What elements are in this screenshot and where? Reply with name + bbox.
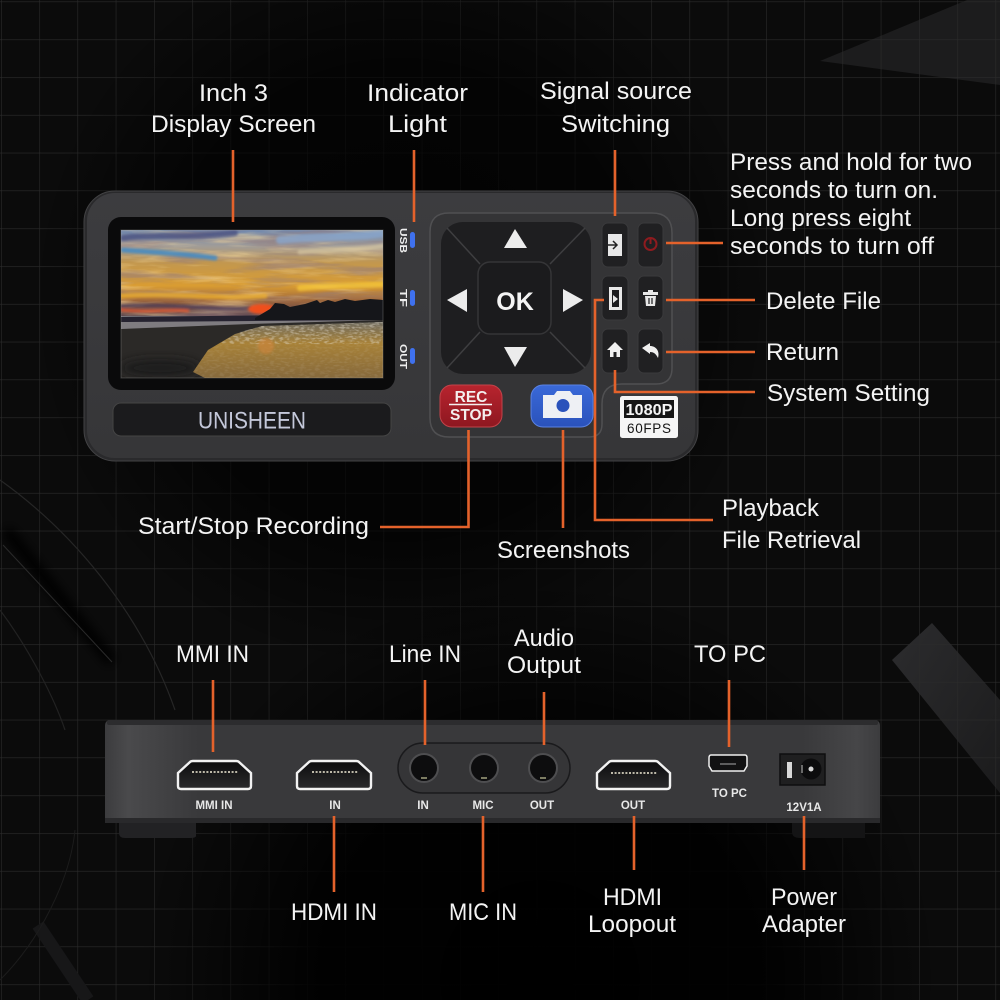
jack: audio output: OUT (530, 800, 554, 812)
button: delete (638, 276, 663, 320)
label: power instructions: Press and hold for two (730, 149, 972, 176)
badge: 1080P 60FPS (620, 396, 678, 438)
leader line: screenshot (562, 430, 564, 528)
label: indicator light (367, 80, 468, 138)
label: signal source switching (540, 78, 692, 138)
leader line: HDMI loopout (633, 816, 635, 870)
label: HDMI loopout: Loopout (588, 911, 676, 938)
label: screenshots: Screenshots (497, 537, 630, 564)
indicator lights: TF (397, 289, 408, 307)
label: signal source switching: Switching (561, 111, 670, 138)
leader line: delete (666, 299, 755, 301)
label: audio output: Output (507, 652, 581, 679)
label: HDMI IN: HDMI IN (291, 899, 377, 926)
label: playback file retrieval: Playback (722, 495, 820, 522)
leader line: system setting (615, 370, 755, 392)
port: 12V power (780, 754, 825, 814)
leader line: TO PC (728, 680, 730, 747)
leader line: audio output (543, 692, 545, 745)
leader line: MMI IN (212, 680, 214, 752)
label: indicator light: Indicator (367, 80, 468, 107)
label: HDMI loopout: HDMI (603, 884, 662, 911)
jack: mic in (470, 754, 498, 812)
directional pad (441, 222, 591, 374)
indicator lights: OUT (397, 344, 408, 369)
label: power adapter (762, 884, 846, 938)
label: power adapter: Power (771, 884, 837, 911)
label: signal source switching: Signal source (540, 78, 692, 105)
label: indicator light: Light (388, 111, 447, 138)
button: return (638, 329, 663, 373)
port: HDMI IN: IN (329, 800, 341, 812)
button: signal source (602, 223, 628, 267)
leader line: power button (666, 242, 723, 244)
front panel of device (84, 191, 698, 461)
background prop: pencil and arcs (0, 480, 175, 1000)
button recess panel (430, 213, 672, 437)
jack: line in: IN (417, 800, 429, 812)
label: system setting: System Setting (767, 380, 930, 407)
label: power instructions (730, 149, 972, 260)
port: 12V power: 12V1A (786, 802, 822, 814)
leader line: Line IN (424, 680, 426, 745)
jack: mic in: MIC (472, 800, 494, 812)
label: power instructions: seconds to turn on. (730, 177, 938, 204)
display image: sunset over beach (120, 230, 385, 378)
button: playback (602, 276, 628, 320)
badge: 1080P 60FPS: 1080P (626, 402, 673, 419)
port: micro USB to PC: TO PC (712, 788, 747, 800)
port: HDMI OUT (597, 761, 670, 812)
label: return: Return (766, 339, 839, 366)
button: power (638, 223, 663, 267)
indicator lights: USB (397, 228, 408, 253)
leader line: indicator light (413, 150, 415, 222)
leader line: display screen (232, 150, 234, 222)
label: Line IN: Line IN (389, 641, 461, 668)
label: MMI IN: MMI IN (176, 641, 249, 668)
button: home (602, 329, 628, 373)
screen bezel (108, 217, 395, 390)
label: display screen: Inch 3 (199, 80, 268, 107)
port: HDMI IN (297, 761, 371, 812)
label: start stop recording: Start/Stop Recording (138, 513, 369, 540)
label: audio output: Audio (514, 625, 574, 652)
jack: audio output (529, 754, 557, 812)
button: record and stop: REC (455, 389, 487, 406)
jack: line in (410, 754, 438, 812)
brand label plate (113, 403, 391, 436)
leader line: record (380, 430, 468, 527)
label: display screen (151, 80, 316, 138)
label: audio output (507, 625, 581, 679)
button: screenshot camera (531, 385, 593, 427)
label: power adapter: Adapter (762, 911, 846, 938)
leader line: return (666, 351, 755, 353)
port: HDMI MMI IN: MMI IN (195, 800, 233, 812)
leader line: MIC IN (482, 816, 484, 892)
label: playback file retrieval: File Retrieval (722, 527, 861, 554)
label: power instructions: Long press eight (730, 205, 911, 232)
directional pad: OK (496, 288, 534, 316)
label: HDMI loopout (588, 884, 676, 938)
leader line: power adapter (803, 816, 805, 870)
brand name: UNISHEEN (198, 408, 306, 434)
label: MIC IN: MIC IN (449, 899, 517, 926)
port: HDMI OUT: OUT (621, 800, 645, 812)
leader line: signal source (614, 150, 616, 216)
label: display screen: Display Screen (151, 111, 316, 138)
badge: 1080P 60FPS: 60FPS (627, 421, 671, 436)
button: record and stop: STOP (450, 407, 492, 424)
leader line: HDMI IN (333, 816, 335, 892)
leader line: playback (595, 300, 713, 520)
label: TO PC: TO PC (694, 641, 766, 668)
label: power instructions: seconds to turn off (730, 233, 934, 260)
port: micro USB to PC (709, 755, 747, 800)
button: record and stop (440, 385, 502, 427)
indicator lights (397, 228, 415, 369)
label: playback file retrieval (722, 495, 861, 554)
rear panel of device (105, 720, 880, 838)
rubber feet (119, 822, 196, 838)
audio jack group (398, 743, 570, 812)
port: HDMI MMI IN (178, 761, 251, 812)
label: delete file: Delete File (766, 288, 881, 315)
